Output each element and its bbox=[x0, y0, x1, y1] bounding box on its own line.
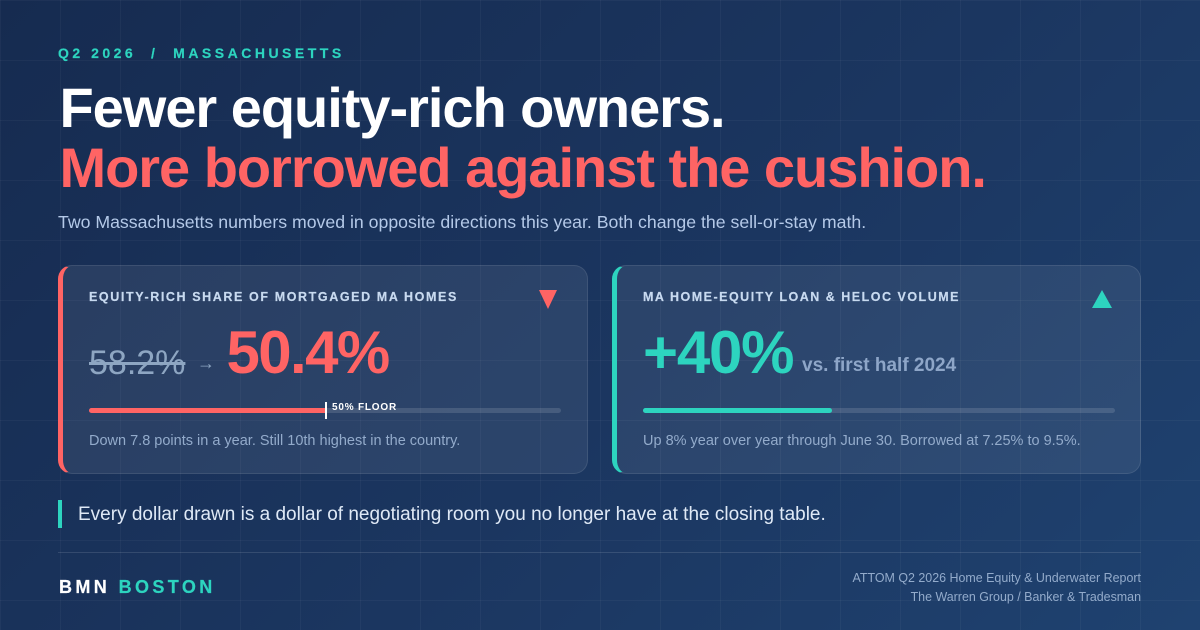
panel label: MA HOME-EQUITY LOAN & HELOC VOLUME bbox=[643, 290, 960, 304]
progress bar bbox=[643, 408, 1115, 413]
progress bar bbox=[89, 408, 561, 413]
current value: 50.4% bbox=[226, 319, 389, 386]
icon: up triangle bbox=[1092, 290, 1112, 308]
panel note: Up 8% year over year through June 30. Borrowed at 7.25% to 9.5%. bbox=[643, 433, 1081, 449]
title line two: More borrowed against the cushion. bbox=[60, 136, 986, 199]
callout bar bbox=[58, 500, 62, 528]
callout text: Every dollar drawn is a dollar of negotiating room you no longer have at the closing table. bbox=[78, 504, 826, 525]
source credits: ATTOM Q2 2026 Home Equity & Underwater Report bbox=[852, 571, 1141, 585]
comparison label: vs. first half 2024 bbox=[802, 355, 956, 376]
panel label: EQUITY-RICH SHARE OF MORTGAGED MA HOMES bbox=[89, 290, 458, 304]
eyebrow: Q2 2026 / MASSACHUSETTS bbox=[58, 45, 345, 61]
brand logo: BMN BOSTON bbox=[59, 577, 216, 597]
arrow: → bbox=[197, 353, 215, 373]
floor label: 50% FLOOR bbox=[332, 402, 397, 413]
bar fill bbox=[89, 408, 326, 413]
panel note: Down 7.8 points in a year. Still 10th highest in the country. bbox=[89, 433, 460, 449]
panel: equity-rich share bbox=[58, 265, 588, 474]
growth value: +40% bbox=[643, 319, 793, 386]
source credits bbox=[852, 571, 1141, 604]
callout bbox=[58, 500, 826, 528]
source credits: The Warren Group / Banker & Tradesman bbox=[911, 590, 1141, 604]
panel: loan and HELOC volume bbox=[612, 265, 1141, 474]
title bbox=[60, 76, 986, 199]
floor marker bbox=[325, 402, 327, 419]
bar fill bbox=[643, 408, 832, 413]
previous value: 58.2% bbox=[89, 344, 185, 382]
title line one: Fewer equity-rich owners. bbox=[60, 76, 725, 139]
subtitle: Two Massachusetts numbers moved in opposite directions this year. Both change the sell-or-stay math. bbox=[58, 212, 866, 232]
icon: down triangle bbox=[539, 290, 557, 309]
